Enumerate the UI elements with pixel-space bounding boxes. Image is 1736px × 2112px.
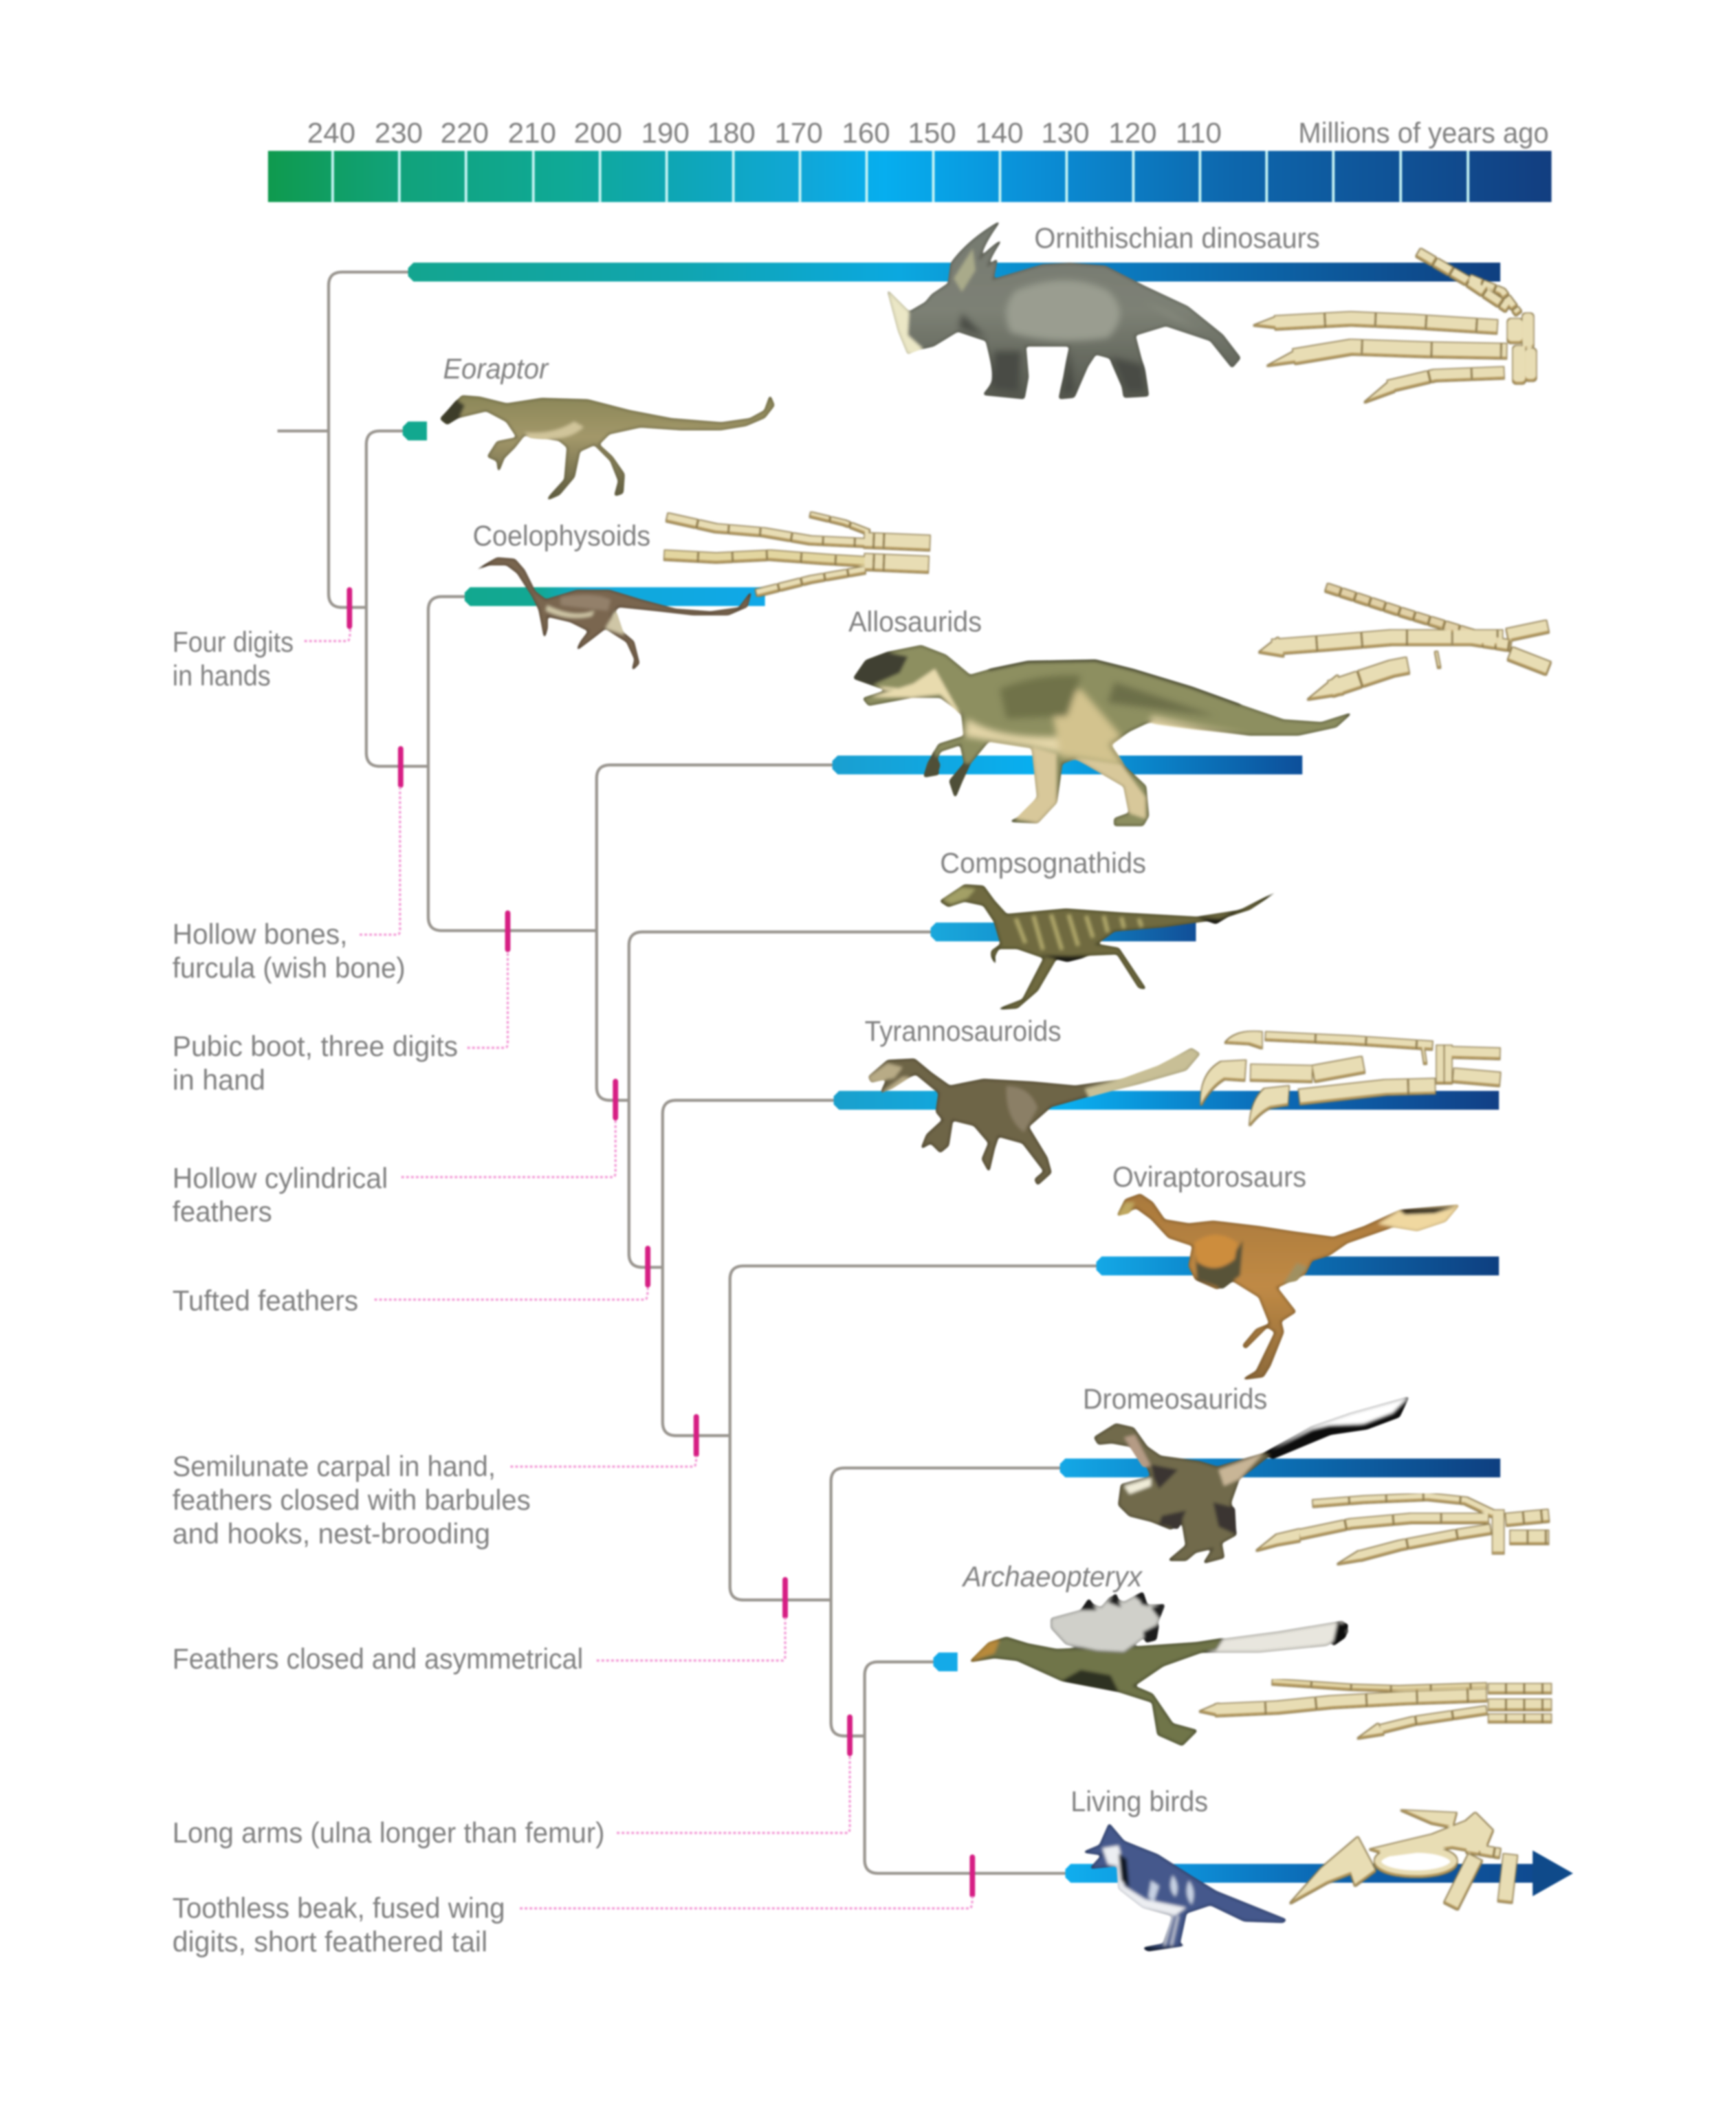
label: toothless beak: Toothless beak, fused wing [173,1891,505,1924]
time scale year labels: 230 [375,117,423,149]
label: four digits: Four digits [173,626,294,658]
group names: Compsognathids [940,846,1146,879]
label: pubic boot: Pubic boot, three digits [173,1030,458,1062]
time scale year labels: 220 [441,117,489,149]
label: semilunate carpal [173,1450,531,1550]
label: four digits: in hands [173,659,271,692]
illustrations of dinosaurs and hand skeletons [441,221,1552,1950]
time scale year labels: 180 [707,117,756,149]
bar: ornithischian [408,263,1500,281]
group names: Dromeosaurids [1083,1383,1267,1415]
time scale year labels: 210 [508,117,556,149]
illustration: tyrannosauroid [868,1048,1200,1185]
label: semilunate carpal: feathers closed with barbules [173,1484,531,1516]
bar: allosaurids [833,756,1302,774]
label: tufted feathers: Tufted feathers [173,1284,358,1317]
label: feathers closed: Feathers closed and asymmetrical [173,1642,583,1675]
label: semilunate carpal: and hooks, nest-brooding [173,1517,490,1550]
character tick marks [349,590,972,1895]
label: long arms: Long arms (ulna longer than femur) [173,1816,605,1849]
illustration: allosaurid [854,646,1351,826]
illustration: oviraptorosaur [1117,1194,1459,1379]
time scale year labels: 130 [1041,117,1090,149]
label: four digits [173,626,294,692]
illustration: compsognathid [941,885,1277,1009]
illustration: tyrannosauroid hand bones [1201,1032,1499,1125]
time scale [268,117,1552,202]
bar: oviraptorosaurs [1097,1257,1499,1275]
time scale year labels: 120 [1108,117,1157,149]
time scale year labels: 170 [774,117,823,149]
group names: Coelophysoids [473,519,650,551]
group names [443,221,1320,1818]
label: pubic boot: in hand [173,1064,265,1096]
illustration: living bird wing bones [1290,1810,1510,1906]
label: hollow cylindrical feathers [173,1162,388,1228]
dotted leader lines [305,628,972,1908]
bar: tyrannosauroids [834,1091,1499,1110]
time scale year labels: 160 [842,117,890,149]
label: hollow cylindrical feathers: feathers [173,1196,272,1228]
time scale year labels: 200 [574,117,622,149]
time scale gradient bar [268,151,1552,202]
group names: Archaeopteryx [961,1561,1143,1593]
illustration: ornithischian hand bones [1253,252,1536,403]
illustration: coelophysoid hand bones [665,515,930,593]
label: hollow bones [173,918,406,984]
illustration: archaeopteryx [970,1592,1348,1746]
label: hollow cylindrical feathers: Hollow cylindrical [173,1162,388,1194]
illustration: dromeosaurid [1095,1397,1409,1563]
arrow: living birds continuing [1532,1851,1573,1896]
label: hollow bones: Hollow bones, [173,918,347,950]
time scale year labels: 110 [1176,117,1222,149]
time scale year labels: 140 [975,117,1024,149]
illustration: dromeosaurid hand bones [1256,1497,1548,1564]
bar: living birds [1065,1864,1535,1883]
label: hollow bones: furcula (wish bone) [173,952,406,984]
time scale year labels: 240 [307,117,355,149]
illustration: archaeopteryx hand bones [1200,1682,1551,1739]
label: semilunate carpal: Semilunate carpal in hand, [173,1450,496,1482]
bar: archaeopteryx marker [934,1653,958,1671]
group names: Living birds [1070,1785,1208,1818]
illustration: allosaurid hand bones [1259,588,1552,700]
illustration: eoraptor [441,396,774,500]
group names: Eoraptor [443,352,549,384]
time scale year labels [307,117,1222,149]
group names: Ornithischian dinosaurs [1034,221,1320,254]
bar: dromeosaurids [1060,1459,1500,1477]
lineage range bars [403,263,1573,1896]
time scale year labels: 150 [908,117,956,149]
group names: Allosaurids [848,606,982,638]
bar: coelophysoids [465,587,765,606]
cladogram branches [278,272,1097,1873]
illustration: living bird [1084,1824,1286,1950]
group names: Tyrannosauroids [865,1015,1062,1047]
character labels [173,626,605,1957]
time scale unit label: Millions of years ago [1298,117,1549,149]
label: toothless beak [173,1891,505,1957]
bar: compsognathids [931,923,1196,941]
bar: eoraptor marker [403,421,427,441]
group names: Oviraptorosaurs [1112,1160,1306,1193]
label: toothless beak: digits, short feathered tail [173,1925,487,1957]
illustration: ornithischian dinosaur [888,221,1240,399]
label: pubic boot [173,1030,458,1096]
time scale year labels: 190 [641,117,690,149]
illustration: coelophysoid [476,558,751,670]
